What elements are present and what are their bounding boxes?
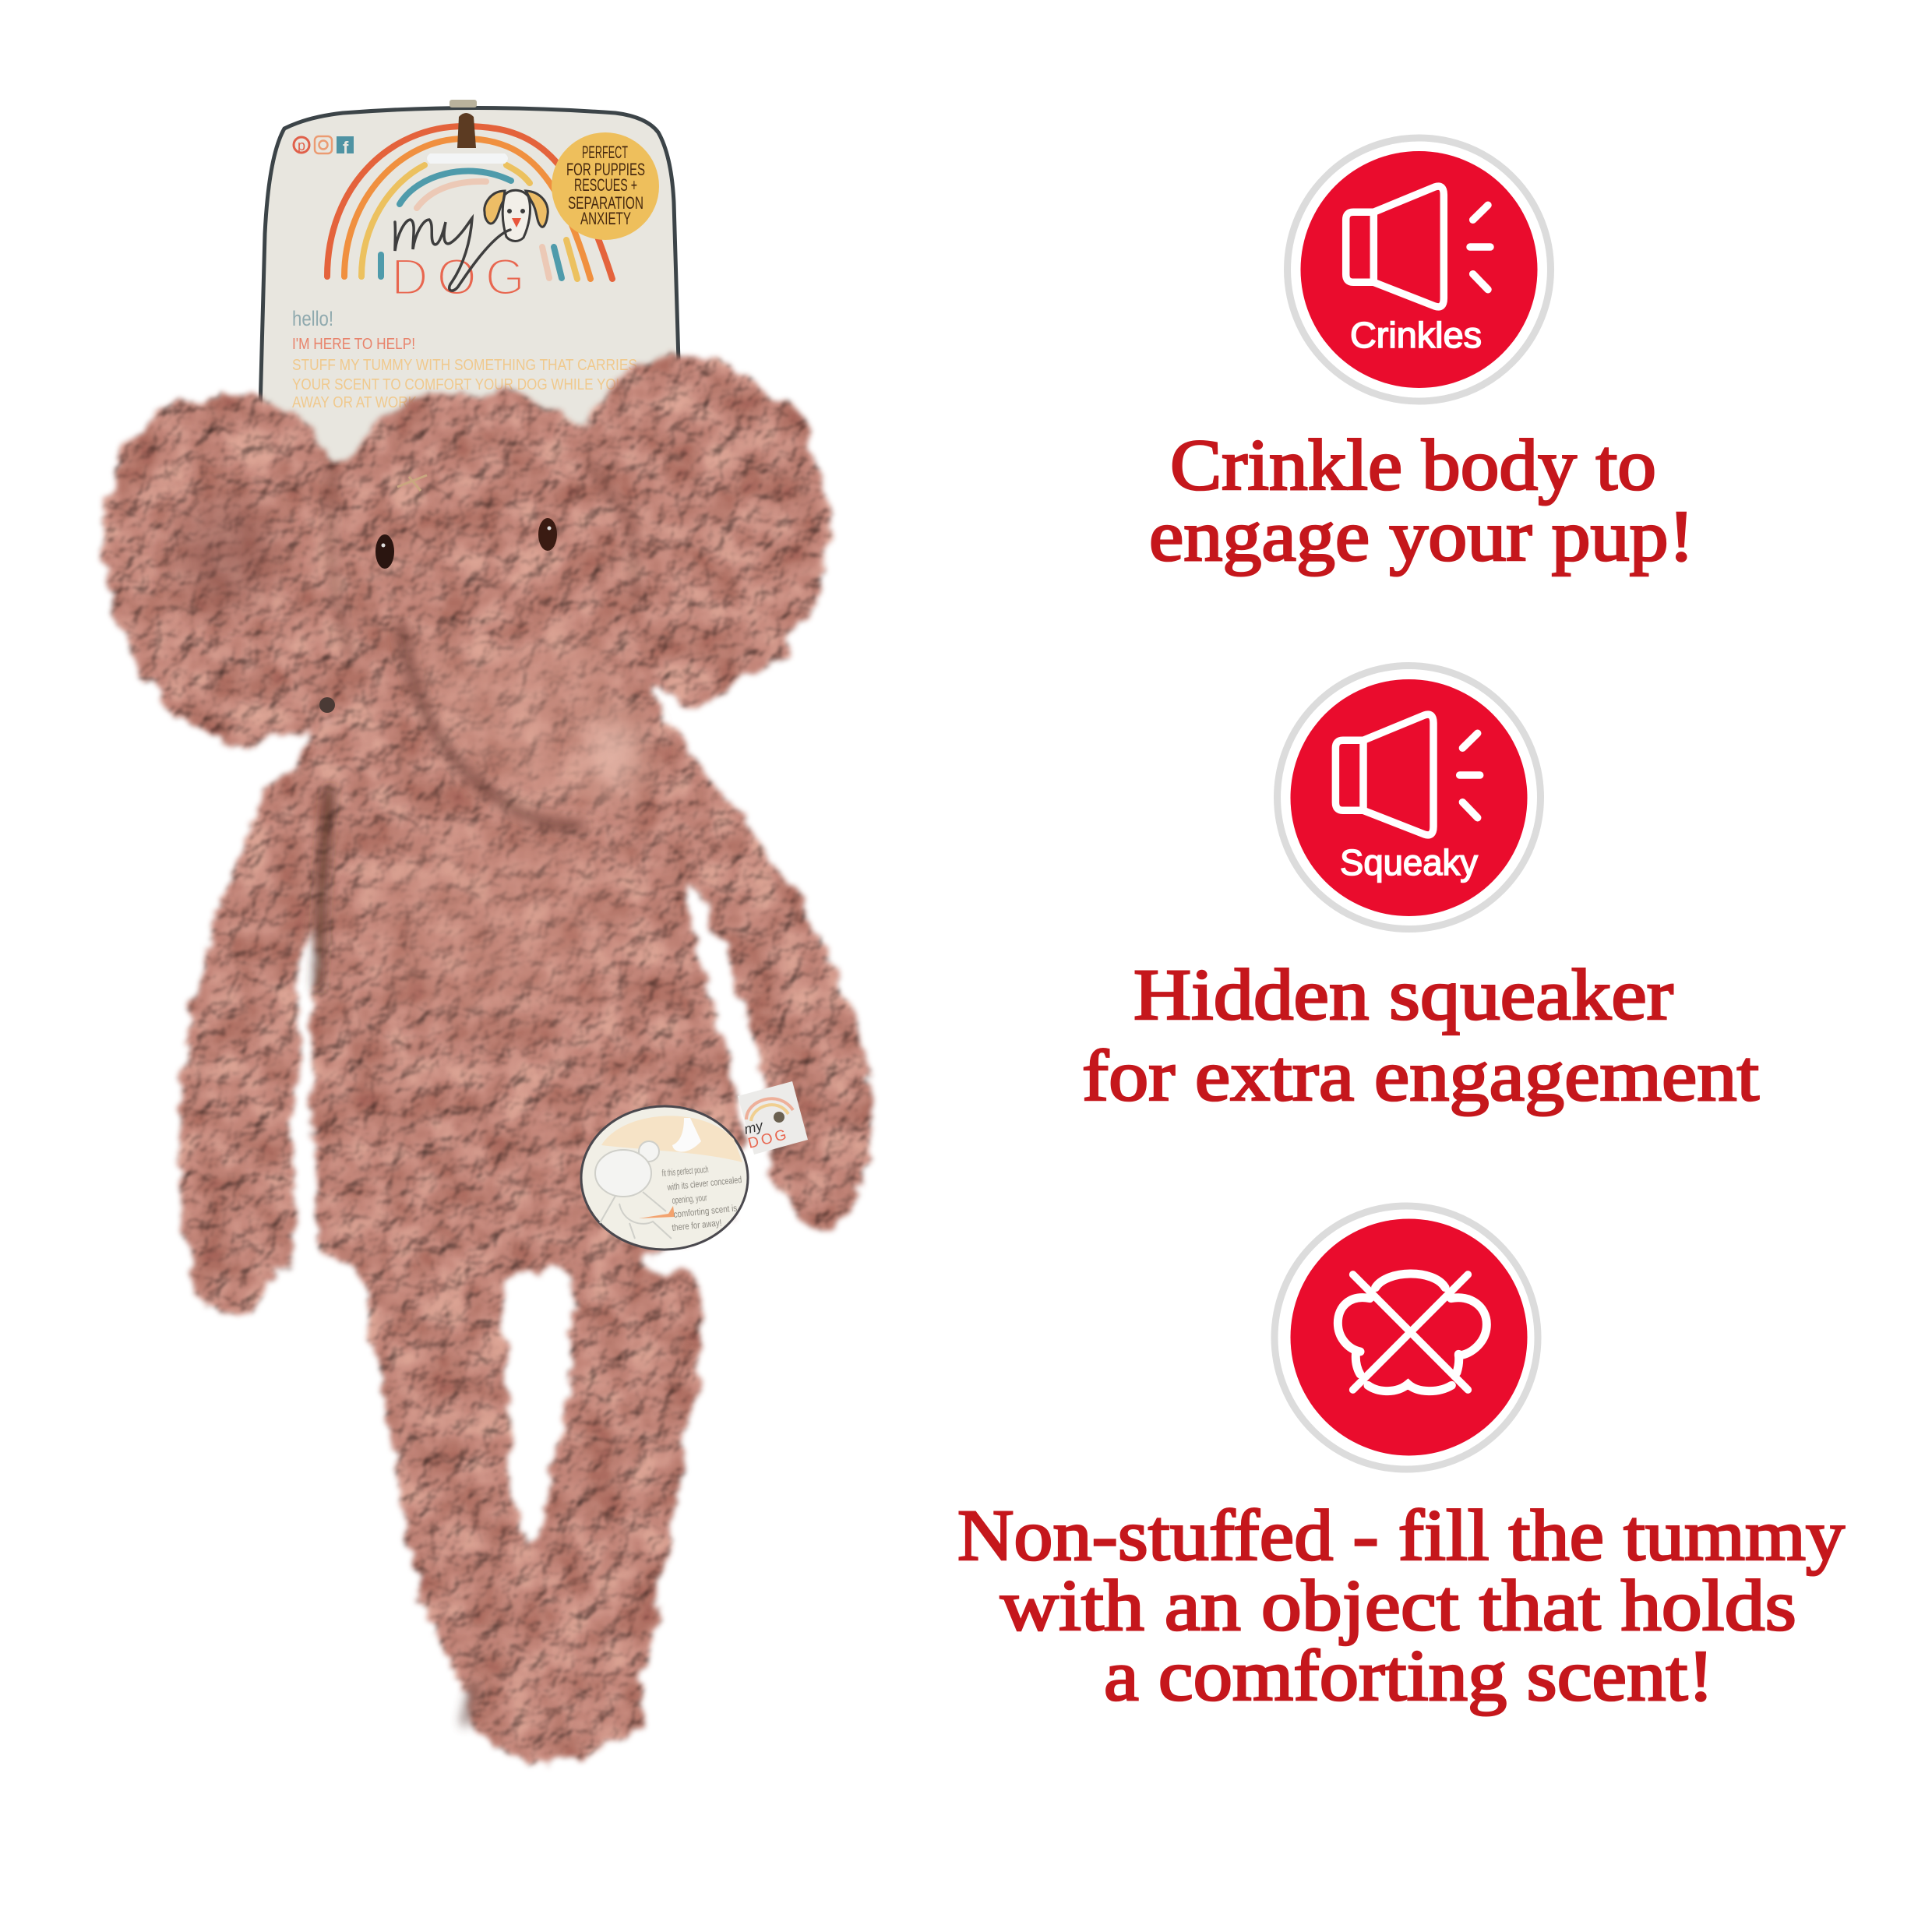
pouch copy	[661, 1164, 742, 1233]
pouch copy: opening, your	[672, 1192, 707, 1206]
card copy: hello!	[292, 307, 333, 330]
icon: crossed stuffing	[1338, 1274, 1486, 1391]
sticker: RESCUES +	[574, 175, 637, 195]
heading: crinkle body	[1149, 425, 1694, 576]
sticker: SEPARATION	[568, 193, 643, 213]
card copy: AWAY OR AT WORK	[292, 394, 418, 411]
plush elephant	[104, 358, 873, 1763]
badge disc	[1290, 1218, 1527, 1455]
round pouch tag	[581, 1106, 748, 1250]
right eye	[538, 518, 557, 551]
left eye	[375, 534, 394, 569]
card copy: STUFF MY TUMMY WITH SOMETHING THAT CARRIES	[292, 357, 637, 374]
rainbow logo	[327, 126, 612, 279]
sticker: FOR PUPPIES	[566, 160, 645, 179]
fur shading	[179, 462, 650, 1726]
metal hanger clip	[450, 100, 477, 108]
orange tab	[639, 1206, 675, 1218]
badge ring	[1274, 1206, 1538, 1469]
feature: non-stuffed	[1274, 1206, 1538, 1469]
pouch copy: fit this perfect pouch	[661, 1164, 709, 1179]
brown loop	[457, 113, 476, 148]
heading: hidden squeaker	[1082, 955, 1759, 1116]
tan thread	[397, 475, 427, 491]
pouch copy: comforting scent is	[673, 1202, 738, 1220]
card copy	[292, 307, 647, 411]
pouch copy: with its clever concealed	[666, 1174, 742, 1193]
social icons: f	[343, 138, 349, 157]
pouch copy: there for away!	[672, 1217, 722, 1233]
fur silhouette	[104, 358, 873, 1763]
badge ring	[1287, 138, 1550, 401]
hang slot	[427, 153, 508, 164]
badge disc	[1301, 151, 1538, 388]
badge label: Crinkles	[1350, 315, 1482, 355]
heading: hidden squeaker: Hidden squeaker	[1133, 955, 1673, 1035]
heading: non-stuffed: a comforting scent!	[1104, 1636, 1714, 1716]
card copy: I'M HERE TO HELP!	[292, 336, 415, 353]
sock drawing	[672, 1118, 701, 1151]
sticker: PERFECT	[582, 143, 628, 162]
sticker	[552, 132, 659, 240]
social icons	[294, 136, 354, 157]
bear drawing	[595, 1141, 672, 1239]
my script signature	[395, 218, 510, 291]
badge disc	[1290, 679, 1527, 916]
card copy: YOUR SCENT TO COMFORT YOUR DOG WHILE YOU'RE	[292, 376, 647, 393]
badge ring	[1278, 665, 1541, 929]
badge label: Squeaky	[1340, 842, 1478, 883]
social icons: p	[298, 138, 305, 153]
heading: crinkle body: Crinkle body to	[1170, 425, 1656, 506]
heading: non-stuffed: with an object that holds	[1000, 1566, 1796, 1646]
heading: crinkle body: engage your pup!	[1149, 496, 1694, 576]
DOG wordmark: DOG	[391, 248, 525, 305]
peach band	[601, 1116, 742, 1162]
sticker: ANXIETY	[580, 209, 631, 228]
heading: hidden squeaker: for extra engagement	[1082, 1036, 1759, 1116]
fabric tag: my	[742, 1117, 765, 1137]
icon: speaker	[1335, 714, 1480, 835]
feature: squeaky	[1278, 665, 1541, 929]
feature: crinkles	[1287, 138, 1550, 401]
dog head logo	[485, 190, 548, 241]
icon: speaker	[1346, 186, 1490, 307]
heading: non-stuffed: Non-stuffed - fill the tummy	[957, 1496, 1846, 1576]
fabric tag	[738, 1081, 808, 1155]
hang card	[259, 100, 682, 467]
collar nub	[319, 697, 335, 713]
fabric tag: DOG	[746, 1126, 788, 1152]
heading: non-stuffed	[957, 1496, 1846, 1716]
